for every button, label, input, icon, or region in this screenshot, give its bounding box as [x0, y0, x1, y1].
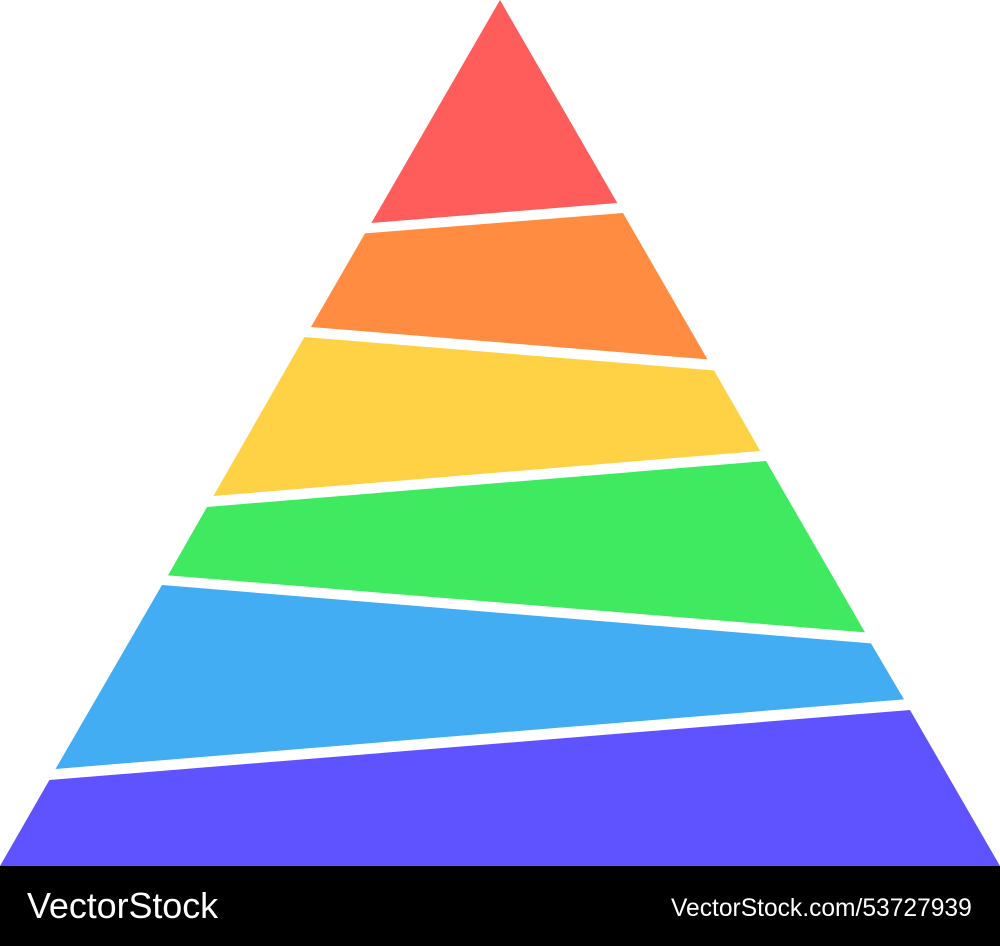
footer bar	[0, 866, 1000, 946]
image url text: VectorStock.com/53727939	[671, 895, 972, 922]
pyramid layer 4: green	[168, 461, 865, 632]
pyramid layer 6: purple	[0, 710, 1000, 866]
pyramid layer 3: yellow	[213, 337, 760, 496]
logo text: VectorStock	[27, 885, 218, 926]
pyramid layer 2: orange	[311, 213, 708, 359]
pyramid layer 5: blue	[56, 585, 904, 769]
pyramid layer 1: red	[371, 0, 617, 223]
